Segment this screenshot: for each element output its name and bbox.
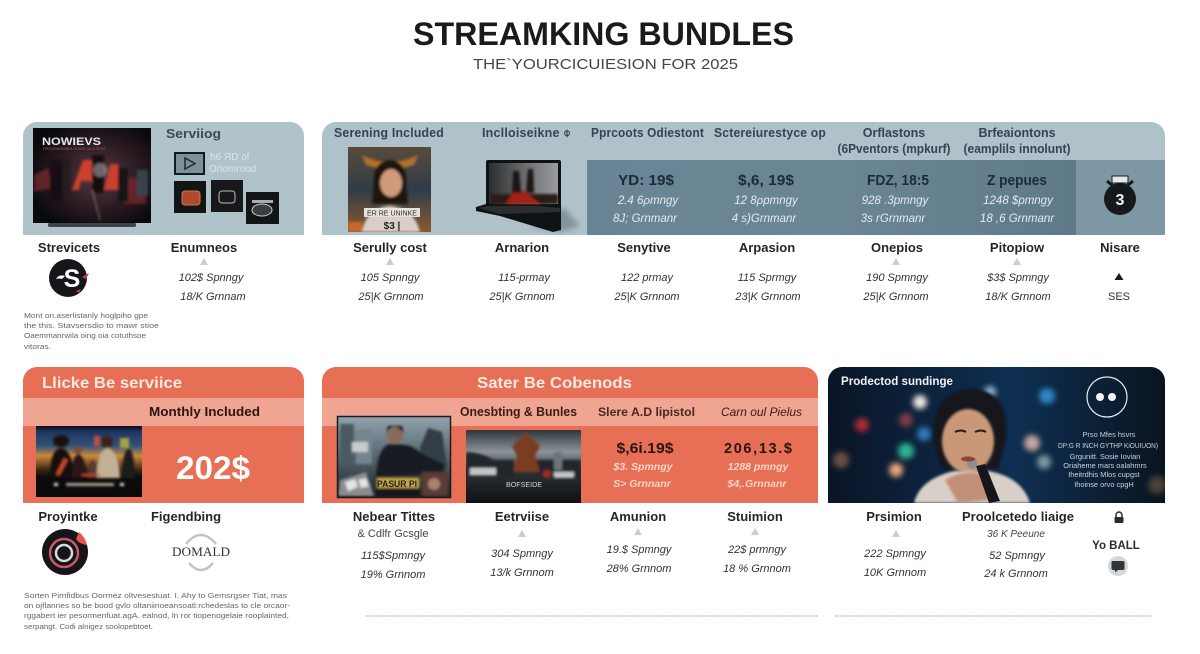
column: Senytive: Senytive — [617, 240, 671, 255]
heading: Serviiog: Serviiog — [166, 126, 221, 141]
text: photo caption: Ihoinse orvo cpgH — [1074, 480, 1134, 489]
price values — [613, 441, 792, 490]
band values: 2.4 6ρmngy — [617, 195, 679, 207]
band values: YD: 19$ — [618, 173, 674, 189]
price values: 206,13.$ — [724, 441, 792, 457]
price values: $4,.Grnnanr — [727, 478, 787, 490]
icon: S logo: S — [64, 265, 80, 293]
column headers: (6Pventors (mpkurf) — [838, 142, 950, 156]
projected rows — [863, 509, 1140, 580]
heading: service: Llicke Be serviice — [42, 375, 182, 392]
text: description: Mont on.aserlistanly hoglpiho gpe — [24, 311, 148, 320]
text: Figendbing: Figendbing — [151, 509, 221, 524]
person with microphone — [914, 389, 1030, 503]
column: Onepios — [862, 240, 929, 303]
column: Onepios: 190 Spmngy — [866, 272, 929, 284]
column: Nebear Tittes: & Cdlfr Gcsgle — [358, 528, 428, 540]
column: Stuimion: 18 % Grnnom — [723, 563, 791, 575]
heading: projected: Prodectod sundinge — [841, 374, 953, 388]
column: Nebear Tittes: 19% Grnnom — [361, 569, 425, 581]
band labels — [460, 405, 802, 419]
image: woman poster: $3 | — [384, 221, 401, 232]
column: Nebear Tittes: 115$Spmngy — [361, 550, 426, 562]
panel: projected savings photo — [828, 367, 1166, 503]
column: Pitopiow — [985, 240, 1051, 303]
icon: timer 3 — [1104, 176, 1136, 215]
column: Onepios: 25|K Grnnom — [862, 291, 929, 303]
text: footnote — [24, 591, 291, 631]
price values: S> Grnnanr — [613, 478, 672, 490]
band values: $,6, 19$ — [738, 173, 794, 189]
label: on-demand: h6 ЯD of — [210, 152, 250, 163]
panel: combined bundles — [322, 367, 818, 503]
image: city poster: BOFSEIDE — [506, 482, 542, 489]
text: footnote: rggabert ier pesormenfuat.agA. ealnod, ln ror tiopenogelaie rooplainted, — [24, 611, 289, 620]
image: TV with poster: PROGRAMMING GUIDE CA 6 SHOT — [43, 147, 107, 151]
price: 202$ — [176, 450, 250, 486]
band labels: Carn oul Pielus — [721, 405, 802, 419]
text: Yo BALL: Yo BALL — [1092, 540, 1140, 552]
column: Prsimion: 222 Spmngy — [863, 548, 927, 560]
text: description: Oaemmanrwila oing oia cotuthsoe — [24, 331, 146, 340]
text: description: vitoras. — [24, 342, 51, 351]
column: Eetrviise: 13/k Grnnom — [490, 567, 554, 579]
column: Arpasion: 115 Sprmgy — [738, 272, 798, 284]
logo: DOMALD — [172, 535, 230, 570]
column: Proolcetedo liaige — [962, 509, 1074, 580]
band values: 1248 $pmngy — [983, 195, 1054, 207]
band values: FDZ, 18:5 — [867, 173, 929, 189]
bokeh lights — [833, 386, 1166, 494]
column: Senytive: 122 prmay — [621, 272, 674, 284]
text: footnote: on ojflannes so be bood gvlo oltaniinoeansoatl:rchedeslas to cle orcaor- — [24, 601, 291, 610]
logo: DOMALD: DOMALD — [172, 545, 230, 559]
icon: lock — [1114, 512, 1124, 523]
image: TV with poster: NOWIEVS — [42, 136, 101, 148]
band labels: Onesbting & Bunles — [460, 405, 577, 419]
column: Arpasion — [734, 240, 801, 303]
column: Prsimion: Prsimion — [866, 509, 922, 524]
column: Serully cost: 25|K Grnnom — [357, 291, 424, 303]
text: footnote: Sorten Pimfidbus Oormez oltvesestuat. I. Ahy to Gemsrgser Tiat, mas — [24, 591, 287, 600]
column: Stuimion: Stuimion — [727, 509, 783, 524]
text: photo caption: Grgunitt. Sosie Iovian — [1070, 452, 1140, 461]
column: Onepios: Onepios — [871, 240, 923, 255]
column: Proolcetedo liaige: Proolcetedo liaige — [962, 509, 1074, 524]
price values: $3. Spmngy — [613, 461, 674, 473]
column: Senytive: 25|K Grnnom — [613, 291, 680, 303]
text: Strevicets: Strevicets — [38, 240, 100, 255]
heading: bundles: Sater Be Cobenods — [477, 375, 632, 392]
price values: $,6i.19$ — [616, 441, 674, 457]
title: STREAMKING BUNDLES — [413, 16, 794, 52]
image: woman poster: ER RE UNINKE — [367, 208, 417, 218]
column: Pitopiow: 18/K Grnnom — [985, 291, 1051, 303]
text: description — [24, 311, 159, 351]
band values: 928 .3pmngy — [862, 195, 929, 207]
band values: 18 ,6 Grnmanr — [980, 213, 1055, 225]
text: Enumneos column: 18/K Grnnam — [180, 291, 246, 303]
text: description: the this. Stavsersdio to mawr stioe — [24, 321, 159, 330]
column: Amunion: 19.$ Spmngy — [607, 544, 673, 556]
column: Eetrviise: 304 Spmngy — [491, 548, 554, 560]
band values: 4 s)Grnmanr — [732, 213, 797, 225]
panel: single service — [23, 367, 304, 503]
column headers: Sctereiurestyce op — [714, 126, 826, 140]
column headers: Pprcoots Odiestont — [591, 126, 705, 140]
column headers: Orflastons — [863, 126, 925, 140]
column: Proolcetedo liaige: 52 Spmngy — [989, 550, 1046, 562]
image: TV with poster — [33, 128, 151, 227]
column: Arnarion: Arnarion — [495, 240, 549, 255]
image: poster frame — [338, 416, 450, 498]
text: photo caption — [1058, 430, 1158, 489]
column: Amunion: 28% Grnnom — [606, 563, 671, 575]
band labels: Slere A.D lipistol — [598, 405, 695, 419]
band values: 8J; Grnmanr — [613, 213, 678, 225]
column headers: Brfeaiontons — [978, 126, 1056, 140]
table rows — [353, 240, 1140, 303]
icon: thumbnail tiles — [174, 180, 279, 224]
image: city poster — [466, 430, 581, 503]
column: Arpasion: 23|K Grnnom — [734, 291, 801, 303]
column: Proolcetedo liaige: 24 k Grnnom — [983, 568, 1048, 580]
panel: services overview — [23, 122, 304, 235]
column: Eetrviise — [490, 509, 554, 579]
column: Serully cost: Serully cost — [353, 240, 428, 255]
column: Nisare: Nisare — [1100, 240, 1140, 255]
label: on-demand — [209, 152, 256, 175]
column: Amunion — [606, 509, 673, 575]
column: Stuimion: 22$ prmngy — [727, 544, 788, 556]
icon: S logo — [49, 259, 89, 297]
column: Nisare — [1100, 240, 1140, 303]
text: photo caption: Iheitrdhis Mlos cupgst — [1068, 470, 1140, 479]
text: photo caption: DP:G R INCH GYTHP KiOUIUON) — [1058, 441, 1158, 450]
text: photo caption: Oriaheme mars oalahmrs — [1063, 461, 1147, 470]
image: man poster — [337, 416, 451, 498]
icon: circle dots — [1087, 377, 1127, 417]
image: laptop — [476, 160, 580, 232]
text: photo caption: Prso Mfes hsvrs — [1083, 430, 1136, 439]
column: Nisare: SES — [1108, 291, 1130, 303]
text: footnote: serpangt. Codi alnigez soolopebtoet. — [24, 622, 153, 631]
column: Prsimion — [863, 509, 927, 579]
band label: Monthly Included — [149, 404, 260, 419]
column: Senytive — [613, 240, 680, 303]
column headers: (eamplils innolunt) — [964, 142, 1070, 156]
column headers — [334, 126, 1070, 156]
image: movie poster — [36, 426, 142, 497]
column: Arnarion: 25|K Grnnom — [488, 291, 555, 303]
band values: 12 8ρpmngy — [734, 195, 799, 207]
icon: timer 3: 3 — [1116, 192, 1125, 209]
column: Stuimion — [723, 509, 791, 575]
column: Arpasion: Arpasion — [739, 240, 795, 255]
image: woman poster — [348, 147, 431, 232]
icon: play box — [175, 153, 204, 174]
column: Pitopiow: $3$ Spmngy — [986, 272, 1050, 284]
column: Eetrviise: Eetrviise — [495, 509, 549, 524]
column: Serully cost: 105 Spnngy — [361, 272, 421, 284]
panel: comparison table — [322, 122, 1165, 235]
column: Prsimion: 10K Grnnom — [864, 567, 926, 579]
column: Nebear Tittes: Nebear Tittes — [353, 509, 435, 524]
column: Nebear Tittes — [353, 509, 435, 581]
column: Proolcetedo liaige: 36 K Peeune — [987, 529, 1045, 540]
text: Proyintke: Proyintke — [38, 509, 98, 524]
price values: 1288 pmngy — [728, 461, 790, 473]
column headers: Serening Included — [334, 126, 444, 140]
bundle rows — [353, 509, 791, 581]
icon: chat bubble — [1108, 556, 1128, 576]
column: Serully cost — [353, 240, 428, 303]
column: Arnarion: 115-prmay — [498, 272, 551, 284]
band values — [613, 173, 1055, 225]
icon: ring logo — [42, 529, 88, 575]
text: Enumneos column — [171, 240, 246, 303]
column: Arnarion — [488, 240, 555, 303]
column: Amunion: Amunion — [610, 509, 666, 524]
label: on-demand: Orlomrood — [209, 164, 256, 175]
column: Pitopiow: Pitopiow — [990, 240, 1045, 255]
column headers: Inclloiseikne ⌽ — [482, 126, 571, 140]
band values: Z pepues — [987, 173, 1047, 189]
band values: 3s rGrnmanr — [861, 213, 926, 225]
text: Enumneos column: 102$ Spnngy — [179, 272, 245, 284]
text: Enumneos column: Enumneos — [171, 240, 237, 255]
subtitle: THE`YOURCICUIESION FOR 2025 — [473, 56, 738, 73]
image: man poster: PASUR PI — [377, 479, 417, 489]
